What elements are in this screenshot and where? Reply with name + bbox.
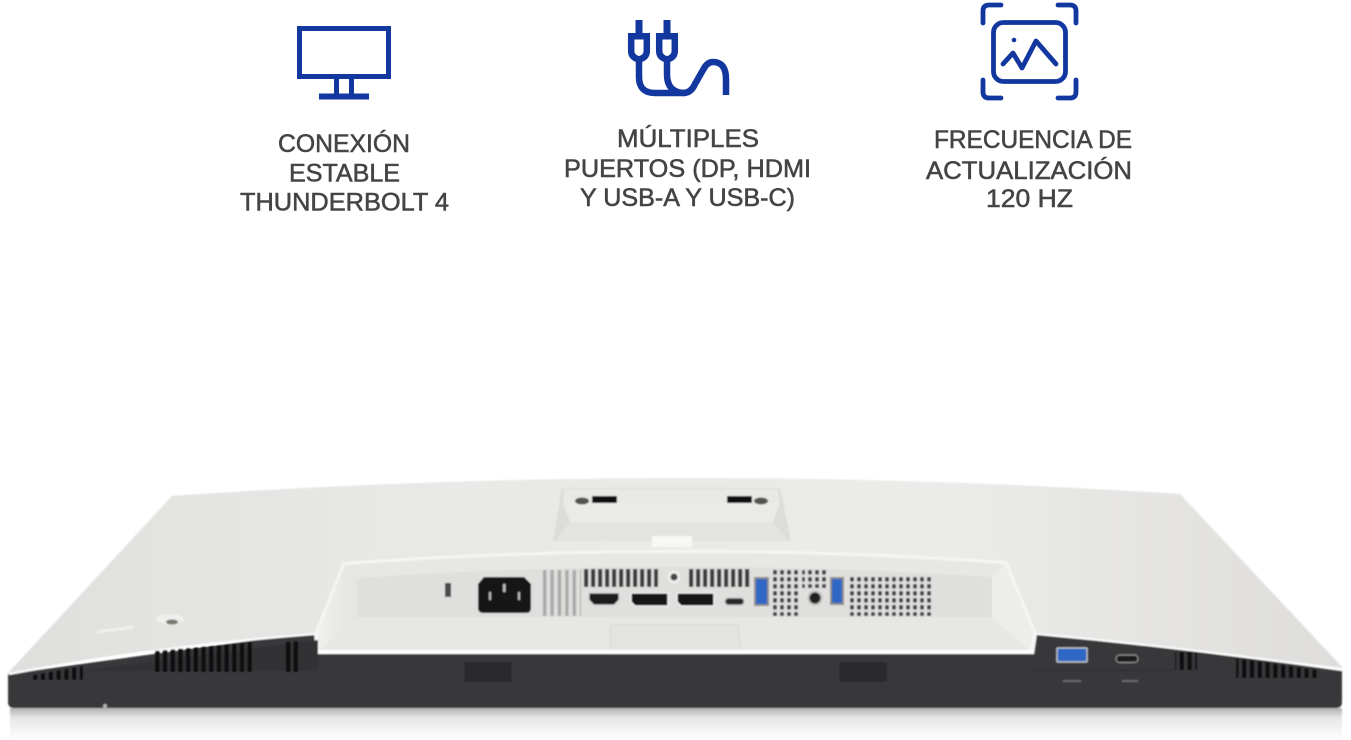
text: Frecuencia de actualización: FRECUENCIA DE bbox=[934, 126, 1132, 154]
icon: cables bbox=[631, 20, 726, 95]
text: Múltiples puertos: Y USB-A Y USB-C) bbox=[580, 184, 795, 212]
feature: Thunderbolt connection bbox=[240, 28, 449, 217]
text: Conexión estable Thunderbolt 4: CONEXIÓN bbox=[278, 129, 410, 158]
text: Conexión estable Thunderbolt 4: THUNDERBOLT 4 bbox=[240, 189, 449, 217]
right side ports and vents bbox=[1033, 648, 1317, 681]
vents bbox=[543, 569, 932, 616]
stand recess bbox=[553, 488, 791, 541]
lock slot bbox=[445, 583, 451, 597]
icon: monitor bbox=[300, 28, 388, 96]
white edge highlight bbox=[9, 634, 1342, 674]
feature: refresh rate bbox=[926, 5, 1132, 213]
text: Conexión estable Thunderbolt 4: ESTABLE bbox=[289, 160, 400, 188]
power button bbox=[156, 614, 184, 624]
text: Múltiples puertos bbox=[564, 124, 811, 212]
USB-C port bbox=[725, 598, 744, 605]
status LED bbox=[103, 704, 107, 708]
USB-A blue port 2 bbox=[830, 577, 844, 605]
icon: image frame bbox=[983, 5, 1076, 98]
monitor photo bbox=[8, 478, 1343, 740]
reflection under monitor bbox=[10, 708, 1342, 740]
USB-A blue port 1 bbox=[754, 577, 769, 606]
text: Múltiples puertos: MÚLTIPLES bbox=[617, 124, 759, 153]
monitor rear surface bbox=[8, 478, 1343, 673]
stand tab bbox=[652, 536, 692, 547]
text: Frecuencia de actualización: 120 HZ bbox=[986, 185, 1073, 213]
clip left bbox=[465, 663, 511, 681]
text: Múltiples puertos: PUERTOS (DP, HDMI bbox=[564, 155, 811, 183]
logo mark left bbox=[97, 627, 133, 632]
power socket bbox=[478, 577, 531, 613]
text: Conexión estable Thunderbolt 4 bbox=[240, 129, 449, 217]
left side vents bbox=[33, 640, 318, 680]
screw hole bbox=[668, 570, 680, 584]
audio jack bbox=[808, 590, 822, 606]
HDMI port bbox=[589, 593, 619, 605]
bay lip bbox=[318, 650, 1034, 654]
feature: multiple ports bbox=[564, 20, 811, 212]
connector bay bbox=[314, 550, 1037, 654]
text: Frecuencia de actualización bbox=[926, 126, 1132, 213]
DisplayPort 2 bbox=[677, 593, 714, 606]
text: Frecuencia de actualización: ACTUALIZACIÓN bbox=[926, 156, 1132, 185]
DisplayPort 1 bbox=[631, 593, 668, 606]
clip right bbox=[840, 663, 886, 681]
monitor dark base bbox=[8, 632, 1342, 708]
